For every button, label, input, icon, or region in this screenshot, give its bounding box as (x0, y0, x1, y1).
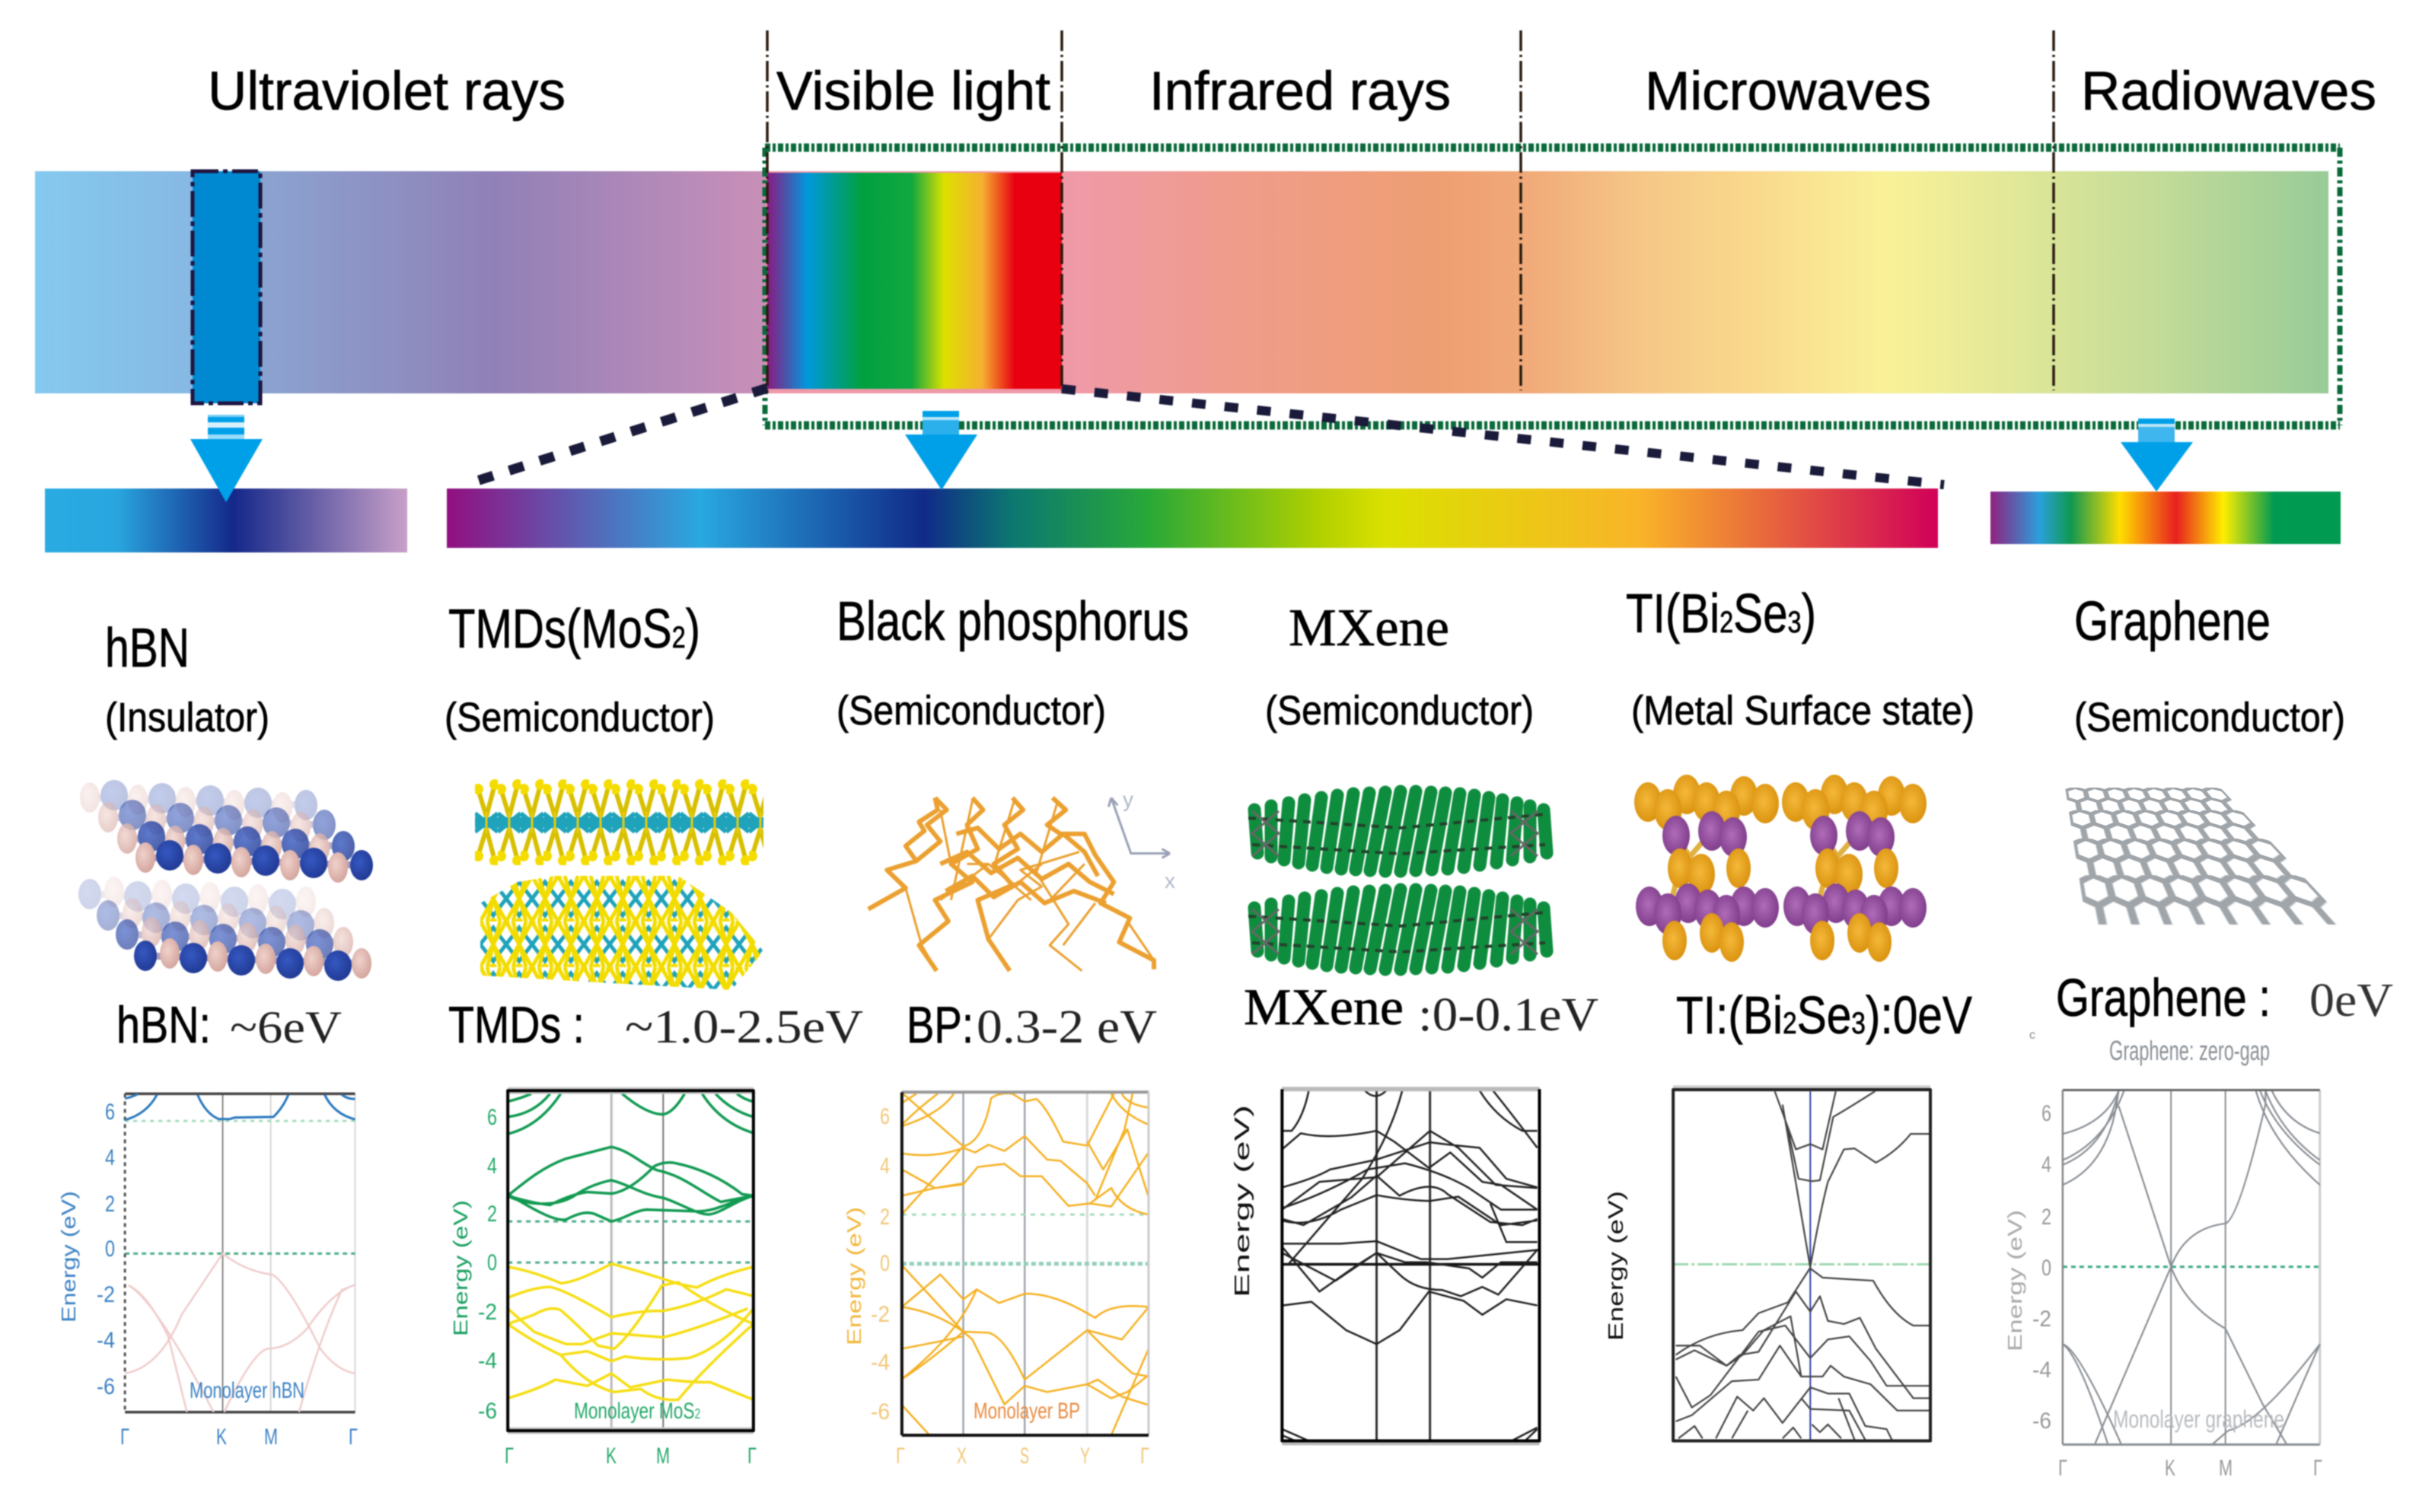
structure: BP axes: x (1165, 869, 1175, 893)
material name: TI: TI(Bi2Se3) (1626, 584, 1816, 645)
gap label: Graphene: Graphene : (2056, 968, 2271, 1027)
gap label: TMDs: ~1.0-2.5eV (625, 1001, 863, 1053)
band structure: BP: Y (1080, 1444, 1090, 1469)
small stray mark: c (2029, 1029, 2035, 1042)
gap label: hBN: hBN: (116, 996, 211, 1054)
gap label: MXene: :0-0.1eV (1418, 989, 1598, 1041)
bar: graphene absorption spectrum (1990, 492, 2341, 544)
structure: Bi2Se3 (1634, 775, 1927, 962)
band structure: MXene (1230, 1089, 1539, 1443)
gap label: MXene: MXene (1244, 978, 1404, 1036)
band structure: hBN: 2 (105, 1192, 115, 1217)
band structure: hBN: K (216, 1424, 227, 1450)
band structure: graphene: 4 (2041, 1152, 2051, 1177)
band structure: graphene: 6 (2041, 1101, 2051, 1126)
band structure: MoS2: Monolayer MoS2 (574, 1399, 700, 1424)
band structure: hBN: 4 (105, 1145, 115, 1170)
band structure: graphene: 2 (2041, 1205, 2051, 1230)
band structure: MoS2: -6 (478, 1399, 497, 1424)
material name: hBN: hBN (105, 618, 190, 679)
heading: Visible light: Visible light (776, 62, 1050, 122)
band structure: graphene: -2 (2032, 1307, 2051, 1332)
material name: MXene: MXene (1289, 599, 1449, 657)
band structure: MoS2: Energy (eV) (449, 1200, 472, 1336)
structure: hBN bilayer (78, 780, 373, 981)
outlined region: graphene absorption range (765, 148, 2340, 425)
structure: BP axes (1108, 788, 1175, 893)
band structure: graphene: -6 (2032, 1409, 2051, 1434)
band structure: graphene (2003, 1090, 2322, 1481)
band structure: MoS2: M (656, 1444, 670, 1469)
band structure: MoS2: 0 (487, 1250, 497, 1275)
band structure: TI: Energy (eV) (1604, 1191, 1627, 1341)
material type: MXene semiconductor: (Semiconductor) (1265, 688, 1534, 734)
material type: Insulator: (Insulator) (105, 695, 269, 740)
band structure: graphene: -4 (2032, 1358, 2051, 1383)
band structure: BP: -6 (871, 1399, 890, 1424)
gap label: Graphene: 0eV (2309, 975, 2393, 1027)
highlighted UV slice (193, 171, 260, 403)
band structure: BP: 2 (880, 1205, 890, 1230)
structure: BP axes: y (1123, 788, 1133, 811)
band structure: hBN: M (264, 1424, 278, 1450)
band structure: graphene: Monolayer graphene (2113, 1405, 2284, 1433)
band structure: TI (1604, 1088, 1930, 1440)
material type: metal surface state: (Metal Surface state) (1631, 688, 1974, 734)
heading: Microwaves: Microwaves (1645, 62, 1931, 122)
caption: Graphene zero-gap: Graphene: zero-gap (2109, 1035, 2270, 1066)
band structure: BP: Γ (1140, 1444, 1149, 1469)
band structure: graphene: 0 (2041, 1256, 2051, 1281)
band structure: hBN: Energy (eV) (57, 1191, 80, 1323)
band structure: MoS2 (449, 1090, 757, 1469)
structure: MXene bilayer (1248, 791, 1547, 969)
band structure: hBN: 0 (105, 1237, 115, 1262)
gap label: MXene (1244, 978, 1598, 1041)
band structure: hBN: -6 (97, 1374, 115, 1399)
material type: BP semiconductor: (Semiconductor) (837, 688, 1106, 734)
material type: graphene semiconductor: (Semiconductor) (2074, 695, 2345, 740)
material type: TMDs semiconductor: (Semiconductor) (445, 695, 715, 740)
gap label: TI: TI:(Bi2Se3):0eV (1676, 985, 1972, 1045)
band structure: BP: -4 (871, 1350, 890, 1375)
gap label: TMDs: TMDs : (448, 996, 585, 1054)
spectrum dividers (767, 30, 2054, 390)
heading: Infrared rays: Infrared rays (1149, 62, 1451, 122)
band structure: BP: 6 (880, 1104, 890, 1129)
band structure: hBN (57, 1093, 358, 1450)
gap label: BP: 0.3-2 eV (977, 1001, 1157, 1053)
band structure: BP: 0 (880, 1251, 890, 1276)
band structure: MoS2: -2 (478, 1300, 497, 1325)
band structure: graphene: M (2219, 1456, 2233, 1481)
bar: semiconductor absorption spectrum (447, 489, 1938, 548)
visible light segment (767, 173, 1062, 389)
band structure: MoS2: 2 (487, 1202, 497, 1227)
structure: MoS2 bilayer (475, 778, 763, 990)
arrow: visible to semiconductor bar (905, 411, 977, 490)
band structure: BP (843, 1092, 1149, 1469)
band structure: hBN: -4 (97, 1328, 115, 1353)
band structure: hBN: 6 (105, 1100, 115, 1125)
band structure: MXene: Energy (eV) (1230, 1105, 1254, 1297)
band structure: graphene: Γ (2058, 1456, 2067, 1481)
band structure: MoS2: K (606, 1444, 617, 1469)
gap label: hBN: ~6eV (230, 1002, 342, 1052)
band structure: MoS2: 4 (487, 1154, 497, 1179)
band structure: graphene: Energy (eV) (2003, 1210, 2026, 1351)
band structure: graphene: K (2165, 1456, 2175, 1481)
zoom guides: visible range expanded (470, 388, 1944, 485)
band structure: BP: Monolayer BP (974, 1399, 1080, 1424)
band structure: BP: 4 (880, 1154, 890, 1179)
arrow: range to graphene bar (2121, 419, 2193, 492)
band structure: hBN: -2 (97, 1282, 115, 1307)
gap label: hBN (116, 996, 342, 1054)
material name: Graphene: Graphene (2074, 591, 2271, 652)
gap label: BP: BP: (907, 996, 974, 1054)
material name: Black phosphorus: Black phosphorus (837, 591, 1189, 652)
heading: Ultraviolet rays: Ultraviolet rays (208, 62, 566, 122)
band structure: BP: Energy (eV) (843, 1207, 865, 1345)
band structure: BP: -2 (871, 1302, 890, 1327)
band structure: BP: Γ (896, 1444, 905, 1469)
band structure: graphene: Γ (2313, 1456, 2322, 1481)
gap label: TMDs (448, 996, 863, 1054)
arrow: UV to hBN (190, 415, 263, 502)
band structure: MoS2: 6 (487, 1105, 497, 1130)
band structure: hBN: Γ (349, 1424, 358, 1450)
heading: Radiowaves: Radiowaves (2081, 62, 2376, 122)
band structure: BP: X (957, 1444, 967, 1469)
bar: hBN absorption spectrum (45, 489, 407, 552)
material name: TMDs: TMDs(MoS2) (448, 599, 700, 660)
band structure: hBN: Γ (120, 1424, 129, 1450)
spectrum band: full electromagnetic spectrum (35, 171, 2328, 393)
band structure: MoS2: Γ (505, 1444, 514, 1469)
band structure: MoS2: Γ (747, 1444, 757, 1469)
band structure: hBN: Monolayer hBN (190, 1378, 304, 1403)
structure: graphene sheet (2064, 787, 2337, 925)
structure: black phosphorus (869, 797, 1154, 971)
band structure: BP: S (1020, 1444, 1029, 1469)
band structure: MoS2: -4 (478, 1348, 497, 1374)
gap label: BP (907, 996, 1157, 1054)
